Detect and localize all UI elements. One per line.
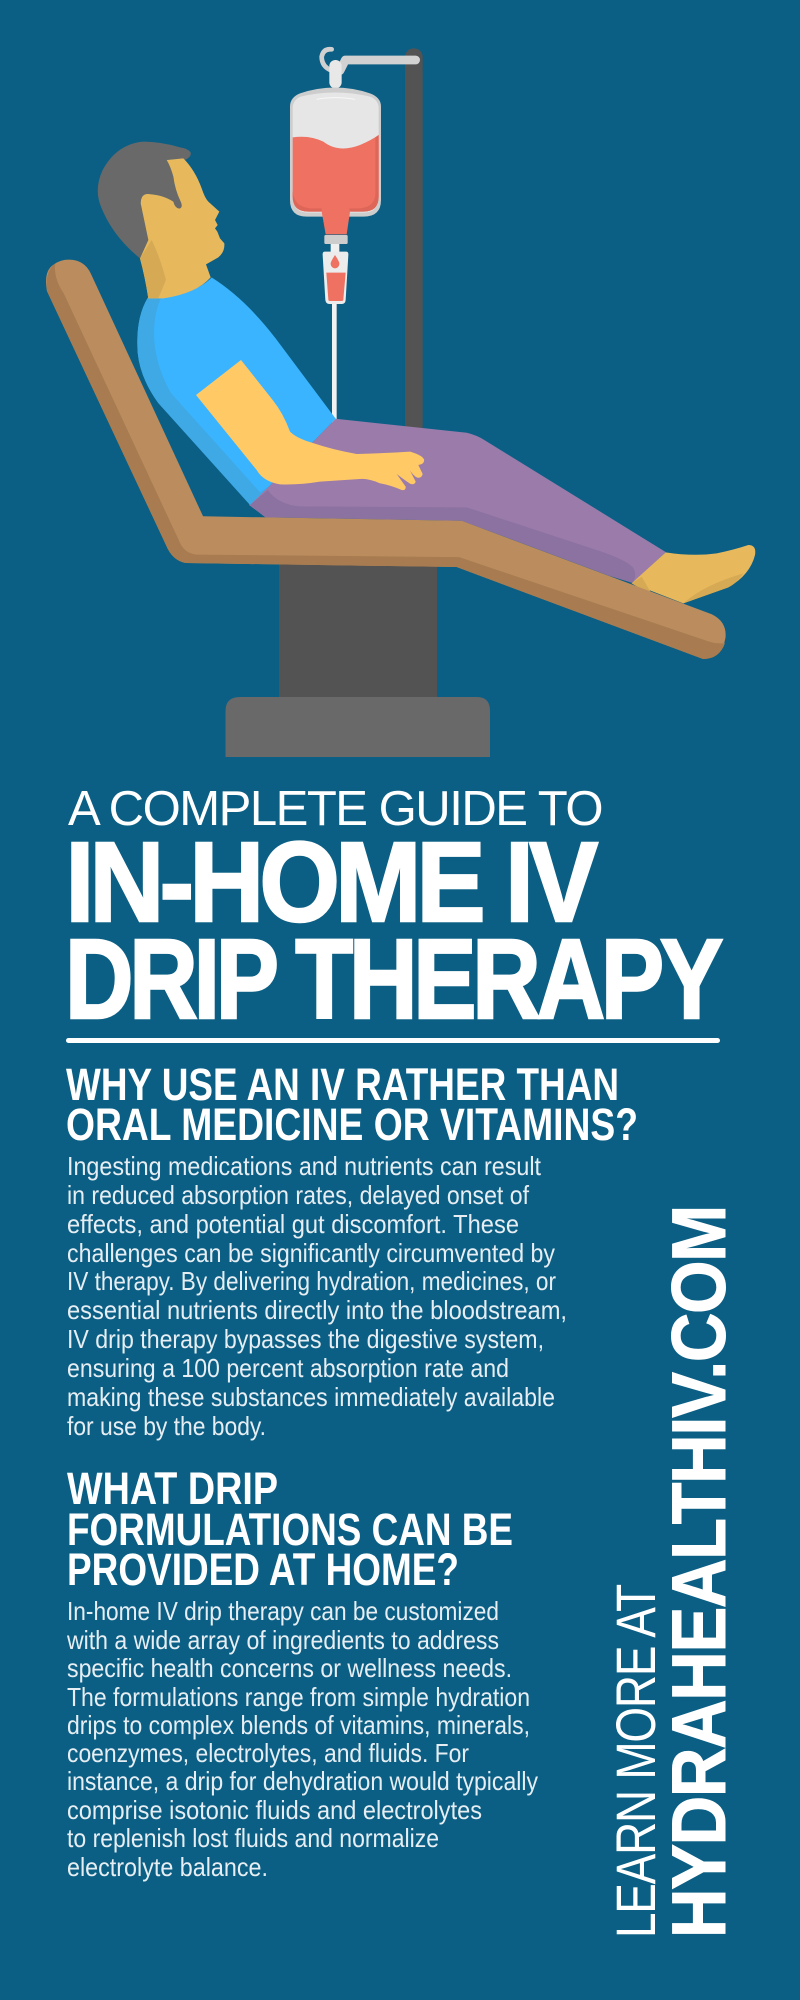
body text: what drip formulations: coenzymes, electrolytes, and fluids. For <box>67 1738 469 1768</box>
body text: what drip formulations: drips to complex blends of vitamins, minerals, <box>67 1710 530 1740</box>
heading: what drip formulations: PROVIDED AT HOME? <box>67 1544 459 1595</box>
body text: what drip formulations: electrolyte balance. <box>67 1852 268 1882</box>
body text: why use an IV: IV drip therapy bypasses the digestive system, <box>67 1324 544 1354</box>
face and neck <box>140 158 224 298</box>
heading: what drip formulations: FORMULATIONS CAN BE <box>67 1504 513 1555</box>
body text: what drip formulations: instance, a drip for dehydration would typically <box>67 1766 538 1796</box>
body text: what drip formulations: to replenish lost fluids and normalize <box>67 1823 439 1853</box>
chair base <box>226 697 490 757</box>
body text: why use an IV <box>67 1151 567 1441</box>
body text: what drip formulations <box>66 1596 538 1882</box>
body text: why use an IV: ensuring a 100 percent absorption rate and <box>67 1353 509 1383</box>
heading: why use an IV <box>66 1059 638 1150</box>
bag hanger <box>329 60 342 88</box>
heading: why use an IV: WHY USE AN IV RATHER THAN <box>66 1059 619 1110</box>
body text: why use an IV: making these substances immediately available <box>67 1382 555 1412</box>
pedestal <box>279 562 437 702</box>
body text: why use an IV: effects, and potential gut discomfort. These <box>67 1209 519 1239</box>
title line one: IN-HOME IV <box>66 819 598 945</box>
vertical call to action <box>604 1206 742 1938</box>
body text: why use an IV: IV therapy. By delivering hydration, medicines, or <box>67 1266 556 1296</box>
heading: why use an IV: ORAL MEDICINE OR VITAMINS? <box>66 1099 638 1150</box>
body text: what drip formulations: specific health concerns or wellness needs. <box>67 1653 512 1683</box>
body text: what drip formulations: The formulations range from simple hydration <box>67 1682 530 1712</box>
hook <box>322 49 332 71</box>
website url: HYDRAHEALTHIV.COM <box>657 1206 742 1938</box>
shirt <box>137 278 336 505</box>
heading: what drip formulations <box>67 1463 513 1595</box>
divider rule <box>66 1038 720 1043</box>
IV stand and bag <box>290 48 423 482</box>
IV tube <box>332 302 337 428</box>
learn more label: LEARN MORE AT <box>604 1585 667 1938</box>
body text: why use an IV: challenges can be significantly circumvented by <box>67 1238 555 1268</box>
IV bag <box>290 87 381 252</box>
body text: what drip formulations: with a wide array of ingredients to address <box>66 1625 499 1655</box>
foot <box>632 545 755 603</box>
body text: why use an IV: for use by the body. <box>67 1411 266 1441</box>
title <box>65 782 722 1042</box>
title eyebrow: A COMPLETE GUIDE TO <box>68 782 602 836</box>
neck shadow <box>140 240 166 298</box>
reclining chair <box>46 260 726 659</box>
body text: what drip formulations: comprise isotonic fluids and electrolytes <box>67 1795 482 1825</box>
head <box>98 142 224 298</box>
trousers <box>249 419 666 583</box>
body text: what drip formulations: In-home IV drip therapy can be customized <box>67 1596 499 1626</box>
hair <box>98 142 191 258</box>
body text: why use an IV: Ingesting medications and nutrients can result <box>67 1151 542 1181</box>
heading: what drip formulations: WHAT DRIP <box>67 1463 278 1514</box>
IV pole <box>405 48 423 482</box>
arm and hand <box>196 360 424 490</box>
illustration: patient reclining with IV drip <box>46 48 755 757</box>
IV pole arm <box>340 60 416 71</box>
body text: why use an IV: essential nutrients directly into the bloodstream, <box>67 1295 567 1325</box>
body text: why use an IV: in reduced absorption rates, delayed onset of <box>67 1180 530 1210</box>
drip chamber <box>323 252 348 304</box>
